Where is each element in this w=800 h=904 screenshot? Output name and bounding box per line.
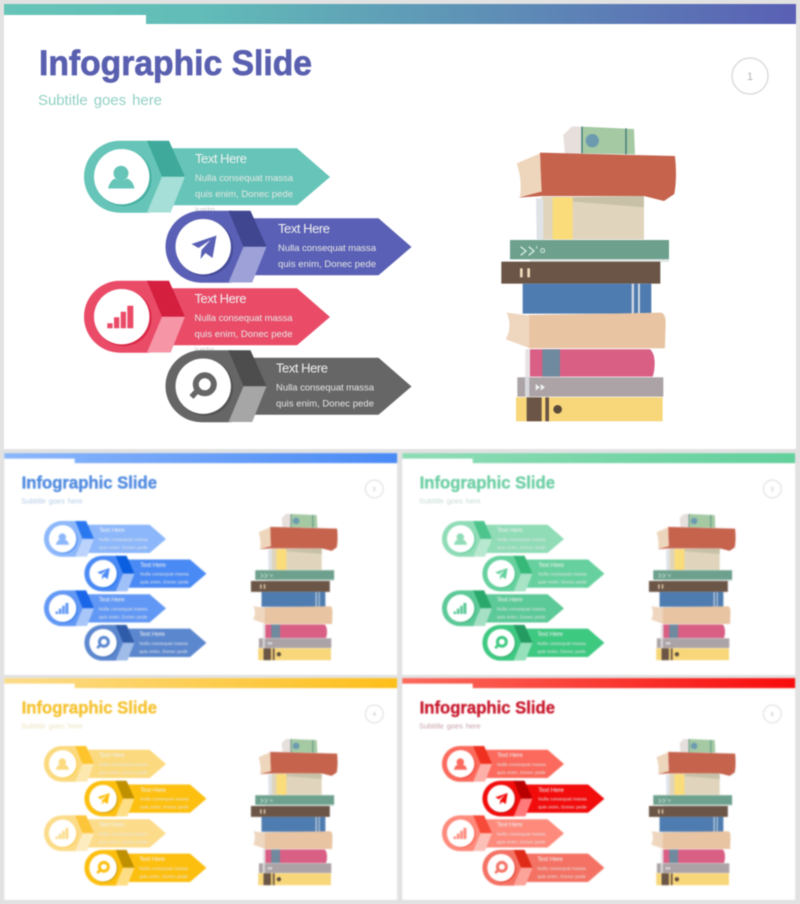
item 1: quis enim, Donec pede xyxy=(497,545,546,550)
item 2: indigo: quis enim, Donec pede xyxy=(278,259,376,270)
item 1: Nulla consequat massa xyxy=(99,537,148,542)
item 2: Text Here xyxy=(140,787,166,794)
illustration: book stack xyxy=(649,739,736,885)
item 1: Nulla consequat massa xyxy=(99,762,148,767)
item 4: grey: Nulla consequat massa xyxy=(276,382,375,394)
page number: 2 xyxy=(373,487,376,493)
item 3: red: justo. xyxy=(194,345,217,356)
item 3: red: quis enim, Donec pede xyxy=(194,329,292,340)
item 3: Nulla consequat massa xyxy=(497,831,546,836)
item 3 xyxy=(44,815,166,851)
slide background xyxy=(4,4,796,449)
item 1: teal: quis enim, Donec pede xyxy=(195,189,293,200)
item 3: Text Here xyxy=(497,596,523,603)
item 1: teal: justo. xyxy=(194,205,218,216)
item 4 xyxy=(482,850,604,886)
item 2: Nulla consequat massa xyxy=(538,797,587,802)
panel: blue slide xyxy=(4,453,397,675)
item 3: Nulla consequat massa xyxy=(99,606,148,611)
item 1: teal: Text Here xyxy=(195,151,247,166)
item 1: quis enim, Donec pede xyxy=(99,770,148,775)
item 3 xyxy=(442,590,564,626)
item 2: Text Here xyxy=(538,787,564,794)
item 3: quis enim, Donec pede xyxy=(99,839,148,844)
page number: 1 xyxy=(747,71,753,83)
item 2: quis enim, Donec pede xyxy=(140,805,189,810)
page number xyxy=(732,58,768,94)
item 4: Text Here xyxy=(537,631,563,638)
item 4: quis enim, Donec pede xyxy=(537,874,586,879)
item 4: grey: quis enim, Donec pede xyxy=(276,398,374,410)
item 2: quis enim, Donec pede xyxy=(538,805,587,810)
item 1: teal: Nulla consequat massa xyxy=(195,173,294,184)
item 4: Nulla consequat massa xyxy=(537,641,586,646)
item 1: Nulla consequat massa xyxy=(497,762,546,767)
header bar xyxy=(4,4,796,24)
item 3: Text Here xyxy=(99,596,125,603)
item 3: Text Here xyxy=(497,821,523,828)
page number: 3 xyxy=(771,487,774,493)
title: Infographic Slide xyxy=(39,44,312,83)
illustration: book stack xyxy=(501,127,676,421)
item 4: grey xyxy=(166,350,412,422)
subtitle: Subtitle goes here xyxy=(419,496,481,505)
title: Infographic Slide xyxy=(22,472,157,492)
header bar xyxy=(4,678,397,688)
item 1 xyxy=(442,521,564,557)
item 4: Nulla consequat massa xyxy=(139,641,188,646)
item 3 xyxy=(442,815,564,851)
subtitle: Subtitle goes here xyxy=(21,721,83,730)
item 2: Text Here xyxy=(538,562,564,569)
slide background xyxy=(402,678,795,900)
illustration: book stack xyxy=(649,514,736,660)
item 2: Text Here xyxy=(140,562,166,569)
item 1 xyxy=(442,746,564,782)
item 4: grey: Text Here xyxy=(276,360,328,376)
panel: main slide xyxy=(4,4,796,449)
item 4: Text Here xyxy=(139,856,165,863)
panel: green slide xyxy=(402,453,795,675)
item 1: Text Here xyxy=(497,527,523,534)
item 2: indigo: Text Here xyxy=(278,221,330,236)
item 1 xyxy=(44,521,166,557)
page number xyxy=(365,705,383,723)
panel: yellow slide xyxy=(4,678,397,900)
slide background xyxy=(402,453,795,675)
title: Infographic Slide xyxy=(22,697,157,717)
item 3: red: Text Here xyxy=(194,291,246,306)
title: Infographic Slide xyxy=(420,697,555,717)
item 4: Nulla consequat massa xyxy=(139,866,188,871)
item 1: quis enim, Donec pede xyxy=(497,770,546,775)
item 2 xyxy=(84,781,206,816)
item 2: indigo: Nulla consequat massa xyxy=(278,243,377,254)
item 2 xyxy=(482,556,604,591)
item 1: Text Here xyxy=(497,752,523,759)
item 2 xyxy=(84,556,206,591)
item 1: quis enim, Donec pede xyxy=(99,545,148,550)
slide background xyxy=(4,453,397,675)
item 2: indigo xyxy=(166,211,412,283)
item 4: quis enim, Donec pede xyxy=(537,649,586,654)
subtitle: Subtitle goes here xyxy=(419,721,481,730)
item 1: Nulla consequat massa xyxy=(497,537,546,542)
item 4 xyxy=(482,625,604,661)
item 2 xyxy=(482,781,604,816)
title: Infographic Slide xyxy=(420,472,555,492)
item 2: Nulla consequat massa xyxy=(538,572,587,577)
item 2: Nulla consequat massa xyxy=(140,572,189,577)
illustration: book stack xyxy=(251,739,338,885)
item 4: quis enim, Donec pede xyxy=(139,874,188,879)
item 4: Nulla consequat massa xyxy=(537,866,586,871)
page number xyxy=(763,480,781,498)
illustration: book stack xyxy=(251,514,338,660)
slide background xyxy=(4,678,397,900)
item 4: Text Here xyxy=(537,856,563,863)
subtitle: Subtitle goes here xyxy=(38,92,162,109)
page number: 5 xyxy=(771,712,774,718)
item 2: Nulla consequat massa xyxy=(140,797,189,802)
header bar xyxy=(4,453,397,463)
item 1: teal xyxy=(84,141,330,216)
item 4 xyxy=(84,850,206,886)
item 3: quis enim, Donec pede xyxy=(99,614,148,619)
item 3: Nulla consequat massa xyxy=(99,831,148,836)
item 3: Text Here xyxy=(99,821,125,828)
header bar xyxy=(402,678,795,688)
header bar xyxy=(402,453,795,463)
item 3: red: Nulla consequat massa xyxy=(194,313,293,324)
item 4: Text Here xyxy=(139,631,165,638)
item 4 xyxy=(84,625,206,661)
page number: 4 xyxy=(373,712,376,718)
panel: red slide xyxy=(402,678,795,900)
page number xyxy=(365,480,383,498)
item 1: Text Here xyxy=(99,527,125,534)
item 4: quis enim, Donec pede xyxy=(139,649,188,654)
page number xyxy=(763,705,781,723)
item 1 xyxy=(44,746,166,782)
item 3 xyxy=(44,590,166,626)
item 3: quis enim, Donec pede xyxy=(497,839,546,844)
item 1: Text Here xyxy=(99,752,125,759)
item 2: quis enim, Donec pede xyxy=(538,580,587,585)
item 3: red xyxy=(84,281,330,356)
subtitle: Subtitle goes here xyxy=(21,496,83,505)
item 3: quis enim, Donec pede xyxy=(497,614,546,619)
item 3: Nulla consequat massa xyxy=(497,606,546,611)
item 2: quis enim, Donec pede xyxy=(140,580,189,585)
